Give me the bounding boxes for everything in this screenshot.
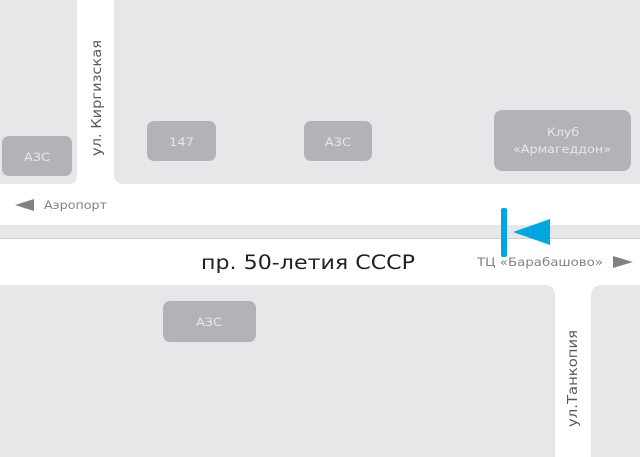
building: club Armageddon bbox=[494, 110, 631, 171]
block: bottom left bbox=[0, 285, 555, 457]
building: АЗС centre bbox=[304, 121, 372, 161]
building: АЗС bottom bbox=[163, 301, 256, 342]
building: 147 bbox=[147, 121, 216, 161]
street label: Tankopiya: ул.Танкопия bbox=[565, 330, 581, 427]
marker: blue arrow bbox=[513, 219, 550, 245]
direction label: airport: Аэропорт bbox=[44, 198, 107, 212]
building: АЗС centre: АЗС bbox=[325, 135, 351, 149]
direction arrow: airport bbox=[15, 199, 34, 211]
block: bottom right bbox=[591, 285, 640, 457]
street label: Kirgizskaya: ул. Киргизская bbox=[89, 40, 105, 156]
direction label: Barabashovo mall: ТЦ «Барабашово» bbox=[476, 255, 603, 269]
building: 147: 147 bbox=[169, 135, 194, 149]
building: club Armageddon: «Армагеддон» bbox=[513, 142, 611, 156]
median strip bbox=[0, 225, 640, 239]
direction arrow: Barabashovo bbox=[613, 256, 633, 268]
street label: prospekt 50-letiya SSSR: пр. 50-летия СССР bbox=[201, 251, 415, 274]
block: top left bbox=[0, 0, 77, 184]
building: АЗС bottom: АЗС bbox=[196, 315, 222, 329]
building: АЗС left bbox=[2, 136, 72, 176]
building: АЗС left: АЗС bbox=[24, 150, 50, 164]
marker: blue stop bar bbox=[501, 208, 507, 257]
block: top centre and right bbox=[114, 0, 640, 184]
building: club Armageddon: Клуб bbox=[547, 125, 579, 139]
